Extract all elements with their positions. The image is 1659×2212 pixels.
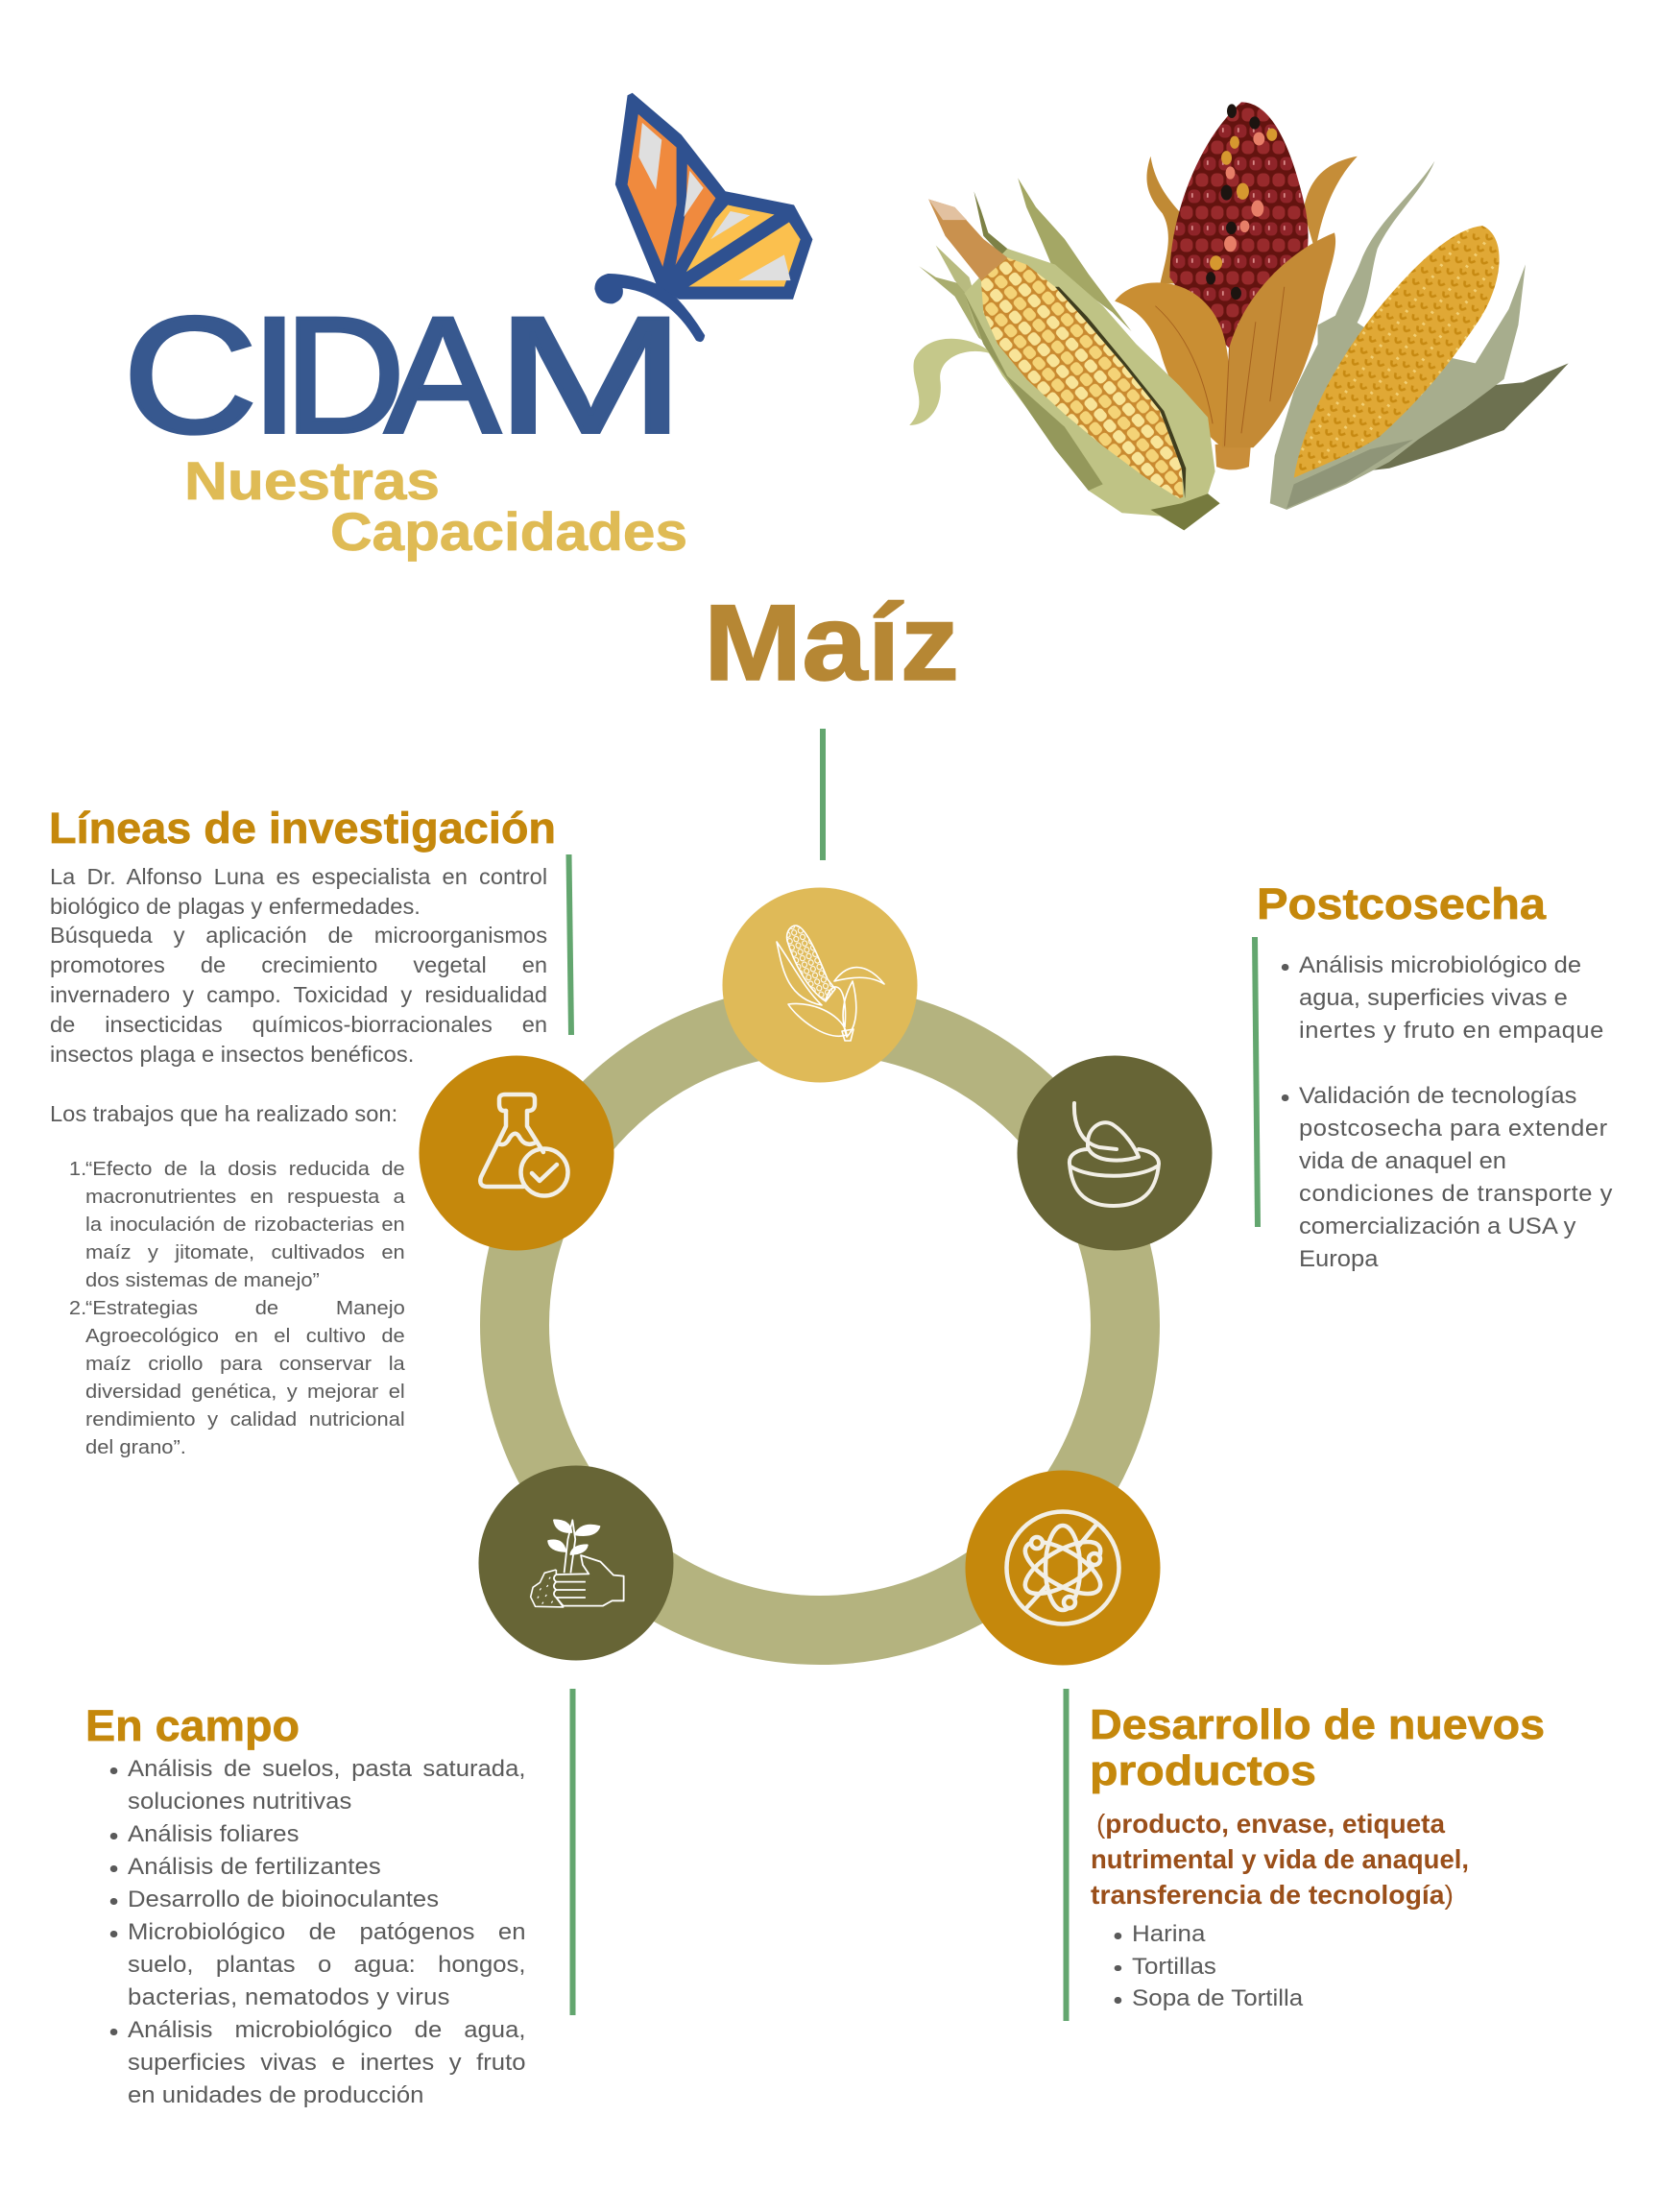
text block: Líneas de investigación description: de insecticidas químicos-biorracionales en (50, 1012, 547, 1037)
node: corn icon on yellow circle (722, 887, 918, 1083)
subtitle: Nuestras Capacidades: Nuestras (184, 450, 440, 511)
heading: Desarrollo de nuevos productos: productos (1090, 1747, 1316, 1794)
list: En campo: soluciones nutritivas (127, 1789, 351, 1815)
list: Postcosecha: condiciones de transporte y (1299, 1181, 1613, 1207)
subheading: producto, envase, etiqueta (1091, 1809, 1469, 1910)
subheading: producto, envase, etiqueta: transferencia de tecnología) (1091, 1880, 1454, 1910)
list: En campo (109, 1756, 525, 2108)
text block: Líneas de investigación description: insectos plaga e insectos benéficos. (50, 1042, 414, 1067)
wordmark: CIDAM: C (123, 283, 257, 468)
numbered list: trabajos realizados: “Efecto de la dosis reducida de (85, 1158, 405, 1180)
icon: butterfly (594, 93, 812, 342)
connector line: Líneas de investigación (566, 854, 574, 1035)
text block: Líneas de investigación description: La Dr. Alfonso Luna es especialista en control (50, 864, 547, 889)
list: En campo: Microbiológico de patógenos en (127, 1919, 525, 1945)
text block: Líneas de investigación description: biológico de plagas y enfermedades. (50, 893, 421, 918)
list: En campo: en unidades de producción (127, 2082, 423, 2108)
text block: Líneas de investigación description: Los trabajos que ha realizado son: (50, 1101, 397, 1126)
text: 1. (69, 1158, 86, 1180)
icon: corn outline (777, 926, 884, 1041)
subheading: producto, envase, etiqueta: (producto, envase, etiqueta (1096, 1809, 1445, 1839)
connector line: En campo (570, 1689, 576, 2015)
list: Postcosecha: comercialización a USA y (1299, 1214, 1575, 1239)
list: Postcosecha: inertes y fruto en empaque (1299, 1018, 1604, 1044)
list: Postcosecha: Europa (1299, 1246, 1378, 1272)
text block: Líneas de investigación description (50, 864, 547, 1126)
list: En campo: Análisis microbiológico de agua, (127, 2017, 525, 2043)
list: Postcosecha: vida de anaquel en (1299, 1148, 1506, 1174)
node: crossed atom icon on gold circle (966, 1471, 1160, 1665)
numbered list: trabajos realizados: rendimiento y calidad nutricional (85, 1408, 405, 1431)
list: En campo: Análisis foliares (127, 1821, 299, 1847)
connector line: Desarrollo (1064, 1689, 1070, 2021)
list: Postcosecha: postcosecha para extender (1299, 1116, 1607, 1142)
text block: Líneas de investigación description: Búsqueda y aplicación de microorganismos (50, 923, 547, 948)
numbered list: trabajos realizados: macronutrientes en respuesta a (85, 1186, 405, 1208)
list: En campo: Desarrollo de bioinoculantes (127, 1887, 439, 1912)
heading: Desarrollo de nuevos productos (1090, 1701, 1545, 1794)
list: Postcosecha: Análisis microbiológico de (1299, 952, 1581, 978)
numbered list: trabajos realizados: maíz criollo para conservar la (85, 1353, 405, 1375)
list: Desarrollo de nuevos productos (1114, 1921, 1304, 2011)
title: Maíz: Maíz (704, 583, 959, 703)
list: Desarrollo de nuevos productos: Tortillas (1131, 1954, 1215, 1980)
node: flask icon on gold circle (419, 1056, 614, 1250)
corn: centre red cob (1115, 102, 1358, 469)
corn: right golden cob (1270, 161, 1569, 510)
connector line: Postcosecha (1252, 937, 1261, 1227)
list: Desarrollo de nuevos productos: Harina (1131, 1921, 1205, 1947)
corn: left yellow cob (909, 178, 1220, 530)
illustration: three corn cobs (909, 102, 1569, 530)
heading: Desarrollo de nuevos productos: Desarrollo de nuevos (1090, 1701, 1545, 1748)
numbered list: trabajos realizados (69, 1158, 405, 1458)
list: Postcosecha: agua, superficies vivas e (1299, 985, 1568, 1011)
numbered list: trabajos realizados: la inoculación de rizobacterias en (85, 1214, 405, 1236)
heading: Líneas de investigación: Líneas de investigación (49, 804, 556, 853)
subtitle: Nuestras Capacidades (184, 450, 687, 562)
numbered list: trabajos realizados: “Estrategias de Manejo (85, 1297, 405, 1319)
numbered list: trabajos realizados: del grano”. (85, 1436, 186, 1458)
list: Desarrollo de nuevos productos: Sopa de Tortilla (1131, 1985, 1303, 2011)
list: Postcosecha (1281, 952, 1613, 1272)
list: En campo: Análisis de suelos, pasta saturada, (127, 1756, 525, 1782)
list: En campo: Análisis de fertilizantes (127, 1854, 380, 1880)
text block: Líneas de investigación description: invernadero y campo. Toxicidad y residualidad (50, 982, 547, 1007)
icon: flask with check (480, 1094, 568, 1196)
icon: bowl with spoon (1070, 1103, 1159, 1206)
wordmark: CIDAM: M (495, 283, 685, 468)
numbered list: trabajos realizados: dos sistemas de manejo” (85, 1269, 320, 1291)
icon: atom crossed out (1006, 1511, 1119, 1624)
wordmark: CIDAM (123, 283, 685, 468)
list: En campo: superficies vivas e inertes y fruto (127, 2050, 525, 2076)
icon: hand holding seedling (531, 1520, 624, 1607)
ring (515, 1020, 1125, 1630)
subtitle: Nuestras Capacidades: Capacidades (330, 501, 687, 562)
text block: Líneas de investigación description: promotores de crecimiento vegetal en (50, 952, 547, 977)
wordmark: CIDAM: I (251, 283, 299, 468)
list: En campo: suelo, plantas o agua: hongos, (127, 1952, 525, 1978)
subheading: producto, envase, etiqueta: nutrimental y vida de anaquel, (1091, 1844, 1469, 1874)
wordmark: CIDAM: D (284, 283, 405, 468)
wordmark: CIDAM: A (385, 283, 500, 468)
heading: En campo: En campo (85, 1701, 300, 1750)
connector line: title to ring (820, 729, 826, 860)
logo: CIDAM with butterfly (123, 93, 812, 468)
node: bowl icon on olive circle (1018, 1056, 1212, 1250)
list: Postcosecha: Validación de tecnologías (1299, 1083, 1576, 1109)
numbered list: trabajos realizados: Agroecológico en el cultivo de (85, 1325, 405, 1347)
heading: Postcosecha: Postcosecha (1257, 879, 1547, 928)
list: En campo: bacterias, nematodos y virus (127, 1984, 449, 2010)
text: 2. (69, 1297, 86, 1319)
numbered list: trabajos realizados: diversidad genética, y mejorar el (85, 1381, 405, 1403)
node: plant in hand icon on olive circle (478, 1465, 674, 1661)
numbered list: trabajos realizados: maíz y jitomate, cultivados en (85, 1241, 405, 1263)
